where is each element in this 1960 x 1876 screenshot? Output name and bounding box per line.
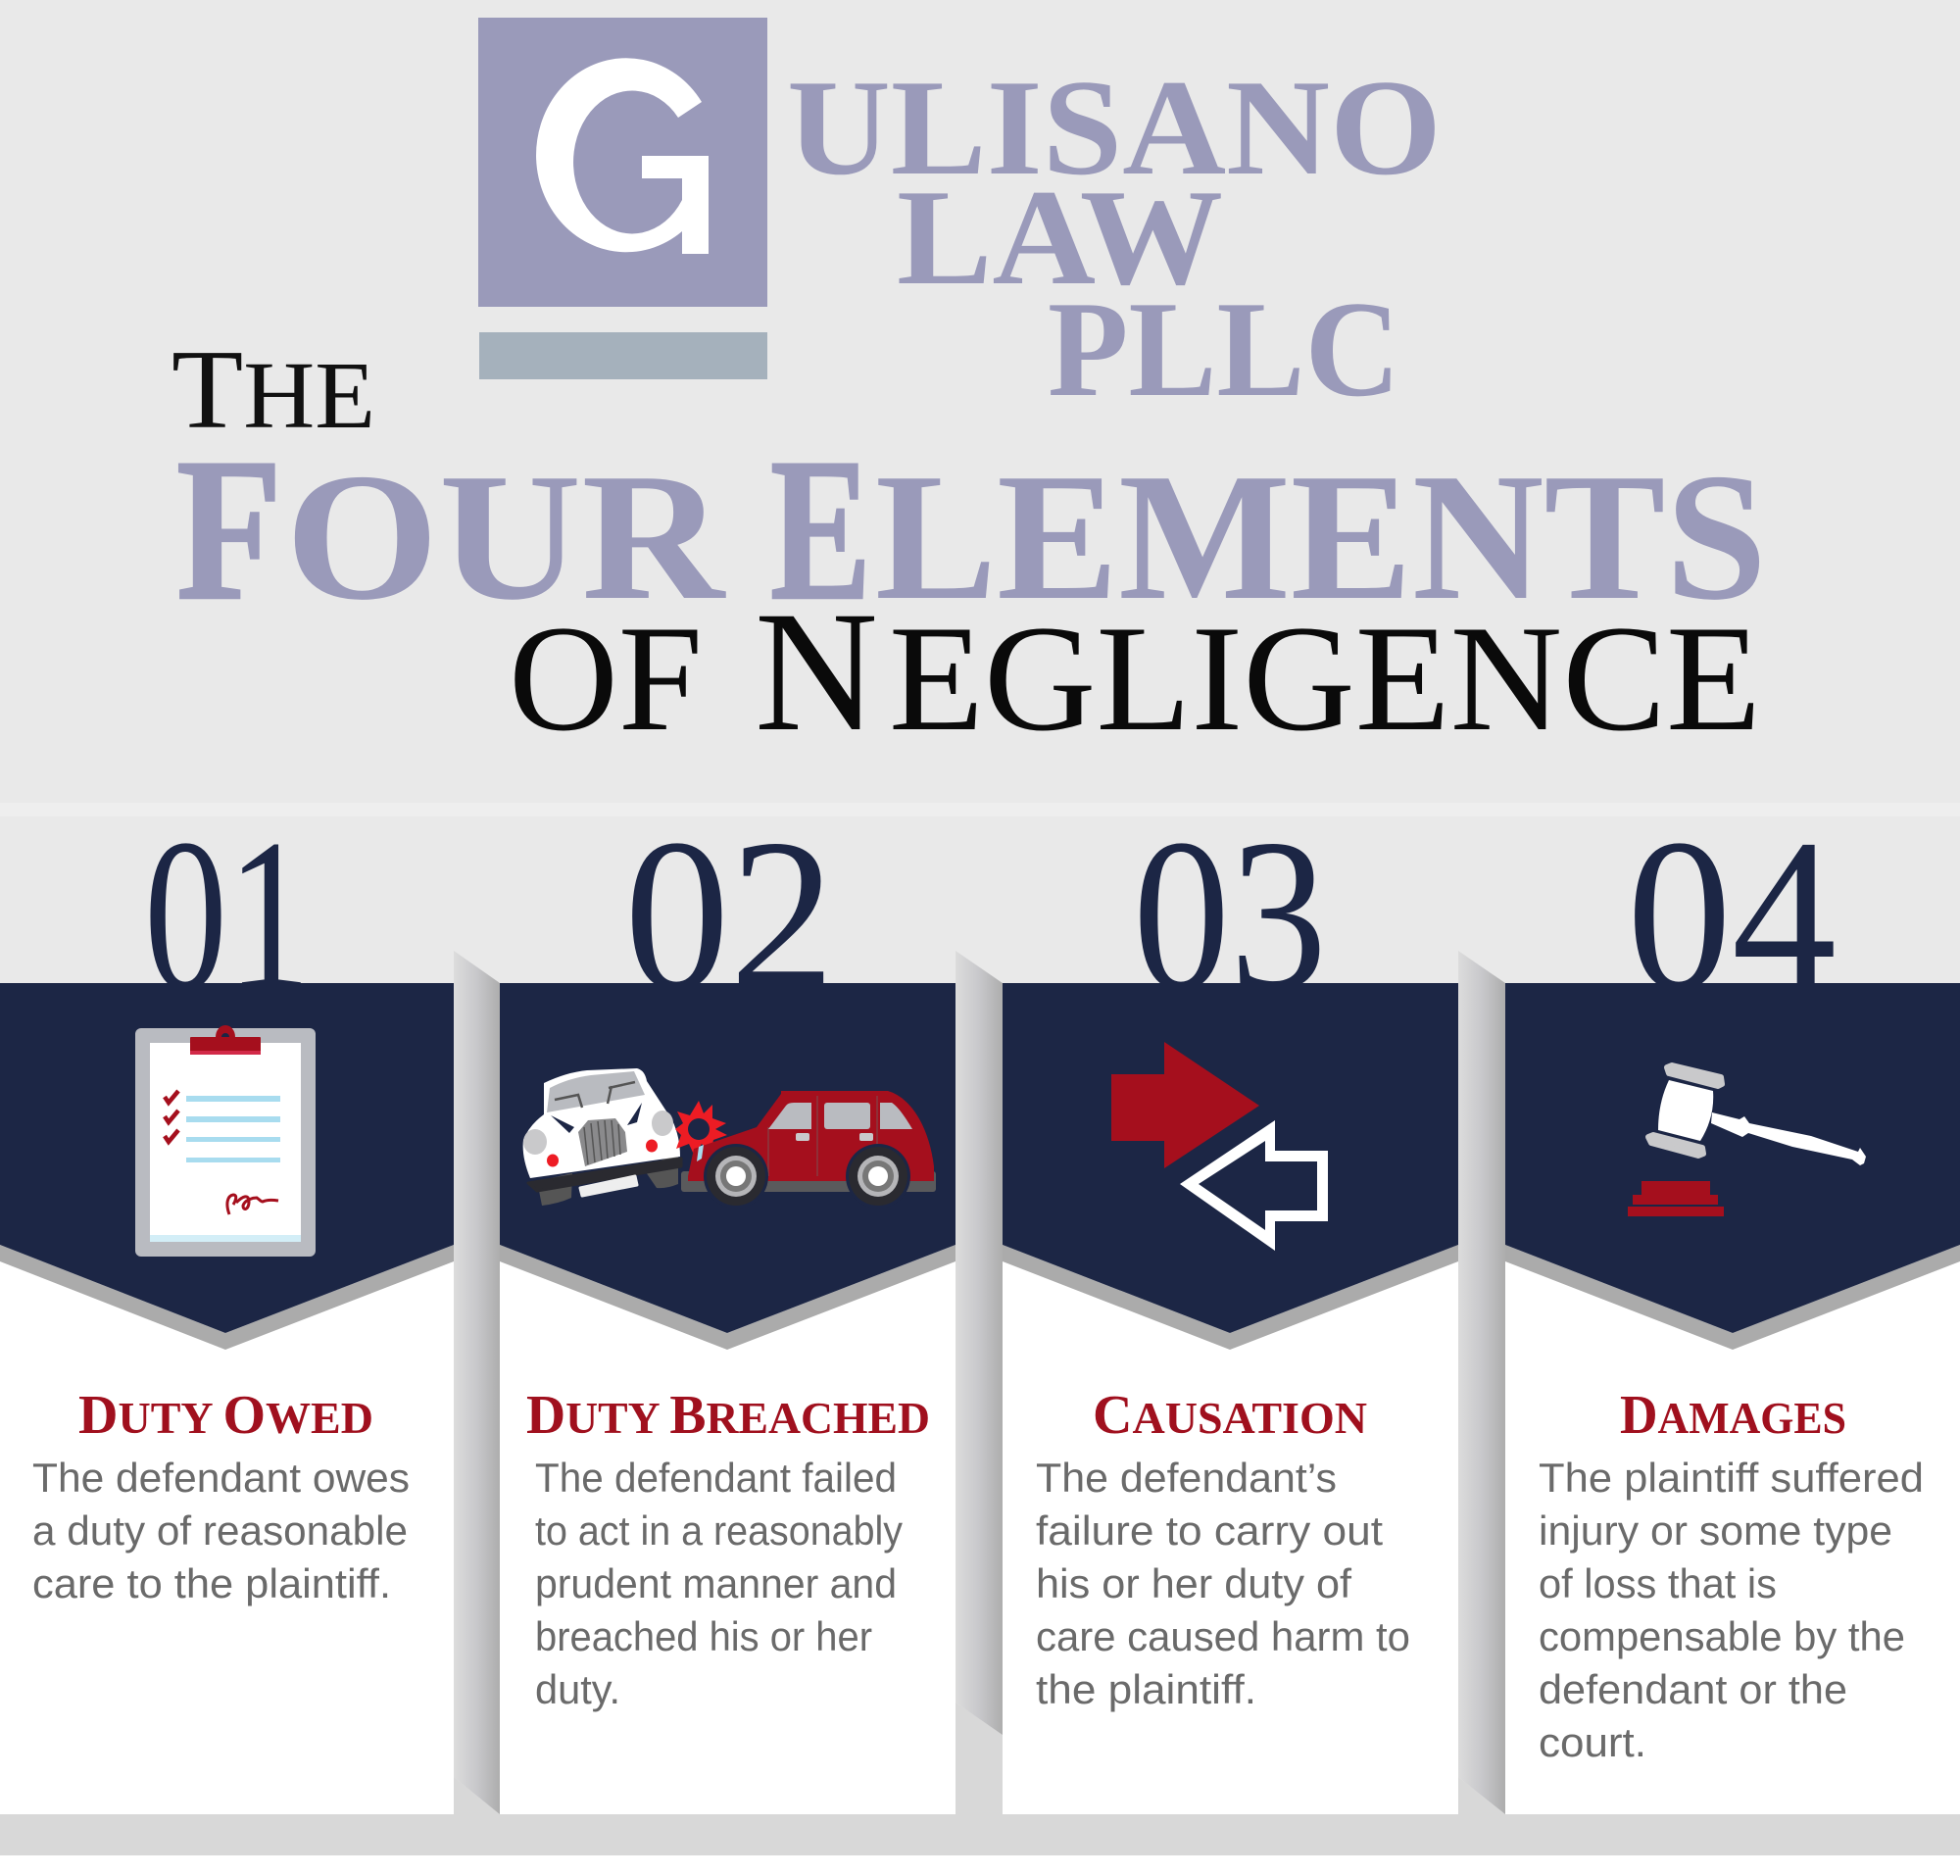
title line: Four Elements: E (770, 417, 871, 642)
gutter 3 (1458, 951, 1505, 1814)
panel 4: damages (1505, 983, 1960, 1814)
icon: opposing arrows (1111, 1042, 1328, 1251)
panel 2 heading: DUTY BREACHED (526, 1385, 930, 1446)
crash burst (675, 1101, 727, 1155)
title line: of Negligence: EGLIGENCE (889, 594, 1761, 763)
panel 3 card (1003, 983, 1458, 1814)
logo wordmark (787, 52, 1442, 425)
panel 1 text: The defendant owes (32, 1455, 410, 1501)
panel 2 text: duty. (535, 1666, 620, 1712)
title line: Four Elements: LEMENTS (875, 436, 1767, 638)
panel 4 text: The plaintiff suffered (1539, 1455, 1924, 1501)
panel 2 text (535, 1455, 903, 1712)
panel 2 text: The defendant failed (535, 1455, 897, 1501)
panel 2 text: prudent manner and (535, 1560, 897, 1606)
panel 1 text: a duty of reasonable (32, 1507, 408, 1554)
panel 4 banner (1505, 983, 1960, 1350)
white outline arrow (1180, 1120, 1328, 1251)
panel 1 heading: DUTY OWED (78, 1385, 373, 1446)
panel 2 card (500, 983, 956, 1814)
white car (523, 1068, 681, 1206)
title line: of Negligence: OF (509, 594, 703, 763)
red arrow (1111, 1042, 1259, 1168)
panel 1 banner (0, 983, 454, 1350)
logo wordmark: ULISANO (787, 52, 1442, 204)
logo wordmark: LAW (897, 162, 1223, 314)
panel 2 text: breached his or her (535, 1613, 872, 1659)
panel 3 text: The defendant’s (1036, 1455, 1337, 1501)
icon: clipboard (135, 1025, 316, 1257)
title line: Four Elements: OUR (285, 436, 726, 638)
panel 3 text (1036, 1455, 1410, 1712)
icon: car crash (523, 1068, 936, 1209)
panel 3 text: the plaintiff. (1036, 1666, 1256, 1712)
logo square with G (478, 18, 767, 307)
logo: Gulisano Law PLLC (478, 18, 1442, 425)
title line: Four Elements: F (176, 417, 282, 642)
number 01: 01 (144, 795, 311, 1036)
panel 4 card (1505, 983, 1960, 1814)
number 02: 02 (624, 795, 835, 1036)
logo wordmark: PLLC (1048, 273, 1400, 425)
panel 4 text: injury or some type (1539, 1507, 1892, 1554)
panel 2: duty breached (500, 983, 956, 1814)
panel 4 text: defendant or the (1539, 1666, 1847, 1712)
gavel head top cap (1667, 1065, 1722, 1086)
panel 1 text: care to the plaintiff. (32, 1560, 391, 1606)
panel 3 text: failure to carry out (1036, 1507, 1383, 1554)
icon: gavel (1628, 1065, 1866, 1216)
panel 4 text: court. (1539, 1719, 1646, 1765)
gavel handle (1711, 1112, 1866, 1165)
panel 2 text: to act in a reasonably (535, 1507, 903, 1554)
gavel head (1658, 1080, 1713, 1141)
number 04: 04 (1627, 795, 1837, 1036)
panel 3 banner (1003, 983, 1458, 1350)
logo grey bar (479, 332, 767, 379)
gutter 2 (956, 951, 1003, 1814)
gavel bottom cap (1648, 1135, 1703, 1156)
panel 4 text: compensable by the (1539, 1613, 1905, 1659)
panel 3 text: care caused harm to (1036, 1613, 1410, 1659)
panel 4 text (1539, 1455, 1924, 1765)
red car (681, 1091, 936, 1209)
gavel base (1628, 1181, 1724, 1216)
panel 2 banner (500, 983, 956, 1350)
panel 1: duty owed (0, 983, 454, 1814)
title (172, 327, 1767, 767)
title line: of Negligence: N (755, 576, 878, 767)
number 03: 03 (1133, 795, 1327, 1036)
panel 3 heading: CAUSATION (1093, 1385, 1367, 1446)
title line: The: THE (172, 327, 375, 452)
panel 3 text: his or her duty of (1036, 1560, 1351, 1606)
panel 1 card (0, 983, 454, 1814)
gutter 1 (454, 951, 500, 1814)
panel 1 text (32, 1455, 410, 1606)
panel 4 text: of loss that is (1539, 1560, 1777, 1606)
panel 3: causation (1003, 983, 1458, 1814)
panel 4 heading: DAMAGES (1620, 1385, 1846, 1446)
